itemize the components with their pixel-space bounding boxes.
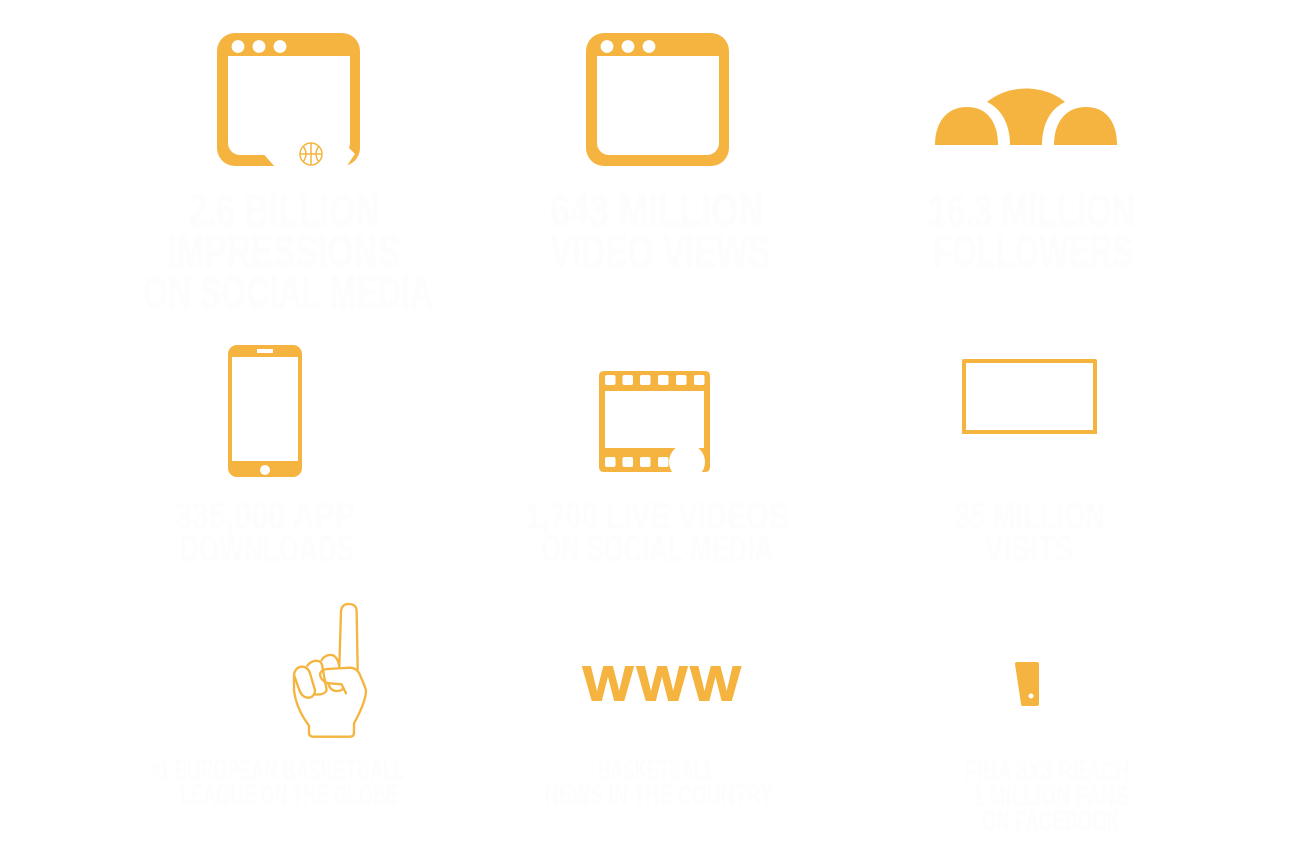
- heading: FIBA 3x3 reach 1 million fans on Facebook: ON FACEBOOK: [982, 805, 1120, 836]
- heading: #1 European basketball league on the globe: LEAGUE ON THE GLOBE: [180, 779, 398, 810]
- icon: www: W: [636, 658, 688, 712]
- stat: video views: [550, 33, 770, 277]
- stat: live videos: [525, 371, 788, 569]
- heading: basketball news in the country: BASKETBALL: [598, 754, 715, 785]
- heading: 2.6 billion impressions on social media: IMPRESSIONS: [167, 226, 400, 277]
- heading: 35 million visits: 35 MILLION: [955, 495, 1105, 536]
- heading: #1 European basketball league on the globe: #1 EUROPEAN BASKETBALL: [150, 754, 405, 785]
- heading: 1,700 live videos on social media: 1,700 LIVE VIDEOS: [525, 495, 788, 536]
- heading: 335,000 app downloads: DOWNLOADS: [180, 528, 354, 569]
- heading: #1 European basketball league on the globe: [150, 754, 405, 810]
- heading: 1,700 live videos on social media: ON SOCIAL MEDIA: [541, 528, 773, 569]
- stat: number one league: [150, 604, 405, 810]
- icon: www: W: [582, 658, 634, 712]
- heading: 16.3 million followers: [929, 185, 1135, 277]
- heading: FIBA 3x3 reach 1 million fans on Facebook: 1 MILLION FANS: [973, 780, 1128, 811]
- icon: www: [582, 658, 742, 712]
- stat: followers: [929, 88, 1135, 277]
- heading: 2.6 billion impressions on social media: ON SOCIAL MEDIA: [143, 267, 433, 318]
- heading: 16.3 million followers: 16.3 MILLION: [929, 185, 1135, 236]
- icon: desktop screen outline: [962, 359, 1097, 434]
- heading: 16.3 million followers: FOLLOWERS: [933, 226, 1133, 277]
- stat: website visits: [955, 359, 1105, 569]
- icon: browser window: [586, 33, 729, 166]
- stat: social media impressions: [143, 33, 433, 318]
- heading: 35 million visits: [955, 495, 1105, 569]
- heading: 643 million video views: [550, 185, 770, 277]
- icon: browser window with basketball: [217, 33, 360, 167]
- heading: 2.6 billion impressions on social media: [143, 185, 433, 318]
- icon: three followers silhouette: [935, 88, 1117, 145]
- heading: 335,000 app downloads: 335,000 APP: [175, 495, 355, 536]
- icon: number one foam finger hand: [294, 604, 366, 737]
- icon: smartphone: [228, 345, 302, 477]
- icon: mobile tag with dot: [1015, 662, 1039, 706]
- heading: basketball news in the country: NEWS IN THE COUNTRY: [545, 779, 773, 810]
- heading: 643 million video views: VIDEO VIEWS: [550, 226, 770, 277]
- icon: film strip: [599, 371, 710, 480]
- heading: 35 million visits: VISITS: [985, 528, 1073, 569]
- heading: 1,700 live videos on social media: [525, 495, 788, 569]
- stat: FIBA 3x3 Facebook fans: [965, 662, 1130, 836]
- heading: 335,000 app downloads: [175, 495, 355, 569]
- stat: basketball news: [545, 658, 773, 810]
- stat: app downloads: [175, 345, 355, 569]
- icon: www: W: [690, 658, 742, 712]
- heading: FIBA 3x3 reach 1 million fans on Facebook: FIBA 3X3 REACH: [965, 755, 1130, 786]
- heading: FIBA 3x3 reach 1 million fans on Facebook: [965, 755, 1130, 836]
- heading: basketball news in the country: [545, 754, 773, 810]
- heading: 2.6 billion impressions on social media: 2.6 BILLION: [188, 185, 380, 236]
- heading: 643 million video views: 643 MILLION: [550, 185, 764, 236]
